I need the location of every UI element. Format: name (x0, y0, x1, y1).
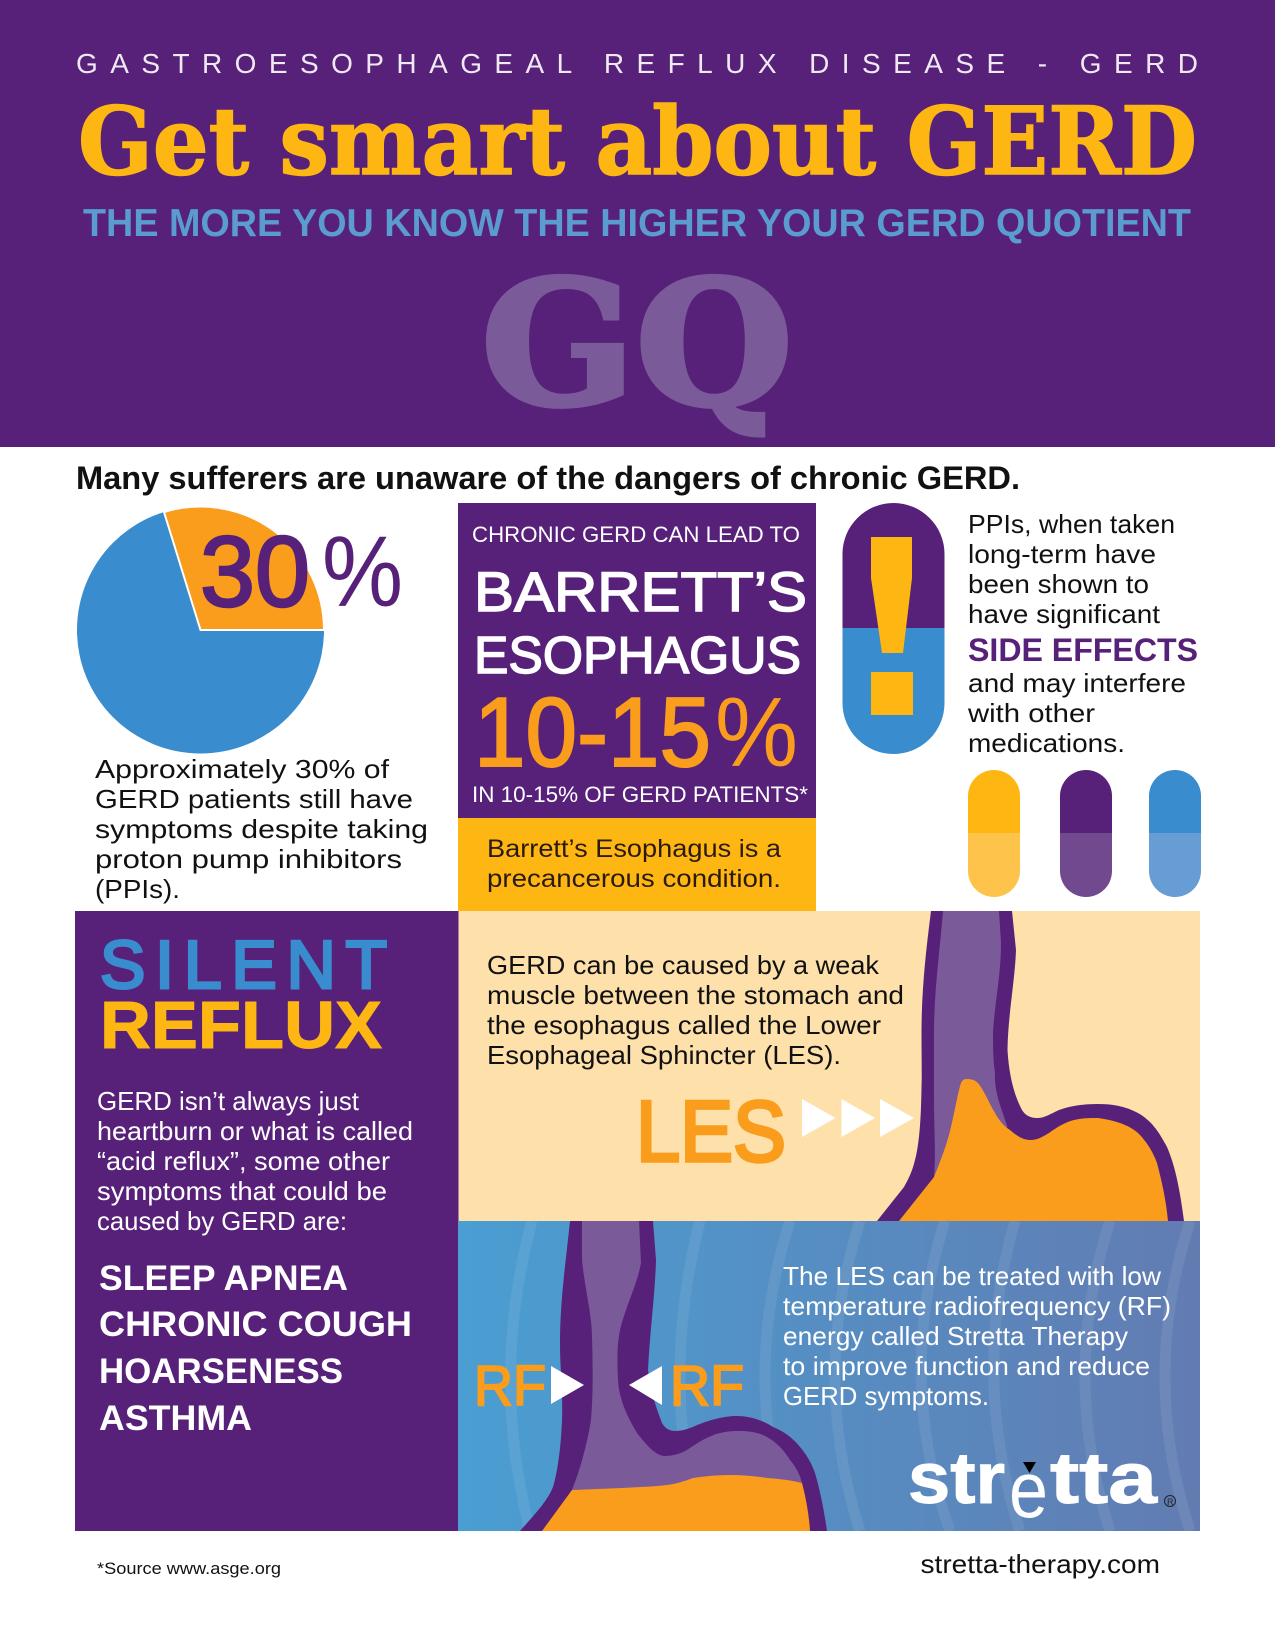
list: symptoms: SLEEP APNEA (99, 1259, 348, 1298)
logo: stretta: str (908, 1439, 1005, 1519)
list: symptoms: ASTHMA (99, 1399, 252, 1438)
text block: LES description: GERD can be caused by a weak (487, 950, 880, 980)
subtitle: THE MORE YOU KNOW THE HIGHER YOUR GERD QUOTIENT (83, 202, 1191, 245)
panel: Barrett's Esophagus (458, 503, 816, 818)
text block: description: “acid reflux”, some other (97, 1146, 390, 1176)
text block: LES description: muscle between the stomach and (487, 980, 904, 1010)
list: symptoms (99, 1259, 412, 1438)
arrow: RF right-pointing (551, 1366, 584, 1404)
text block: PPI side effects: have significant (968, 599, 1161, 629)
heading: reflux: REFLUX (100, 988, 382, 1063)
logo: stretta: R (1167, 1497, 1174, 1507)
statistic: 10-15%: % (715, 677, 798, 787)
text block: PPI side effects: medications. (968, 728, 1125, 758)
text block: LES description: Esophageal Sphincter (LES). (487, 1040, 841, 1070)
list: symptoms: HOARSENESS (99, 1352, 343, 1391)
text block: Stretta description: temperature radiofrequency (RF) (783, 1291, 1171, 1321)
panel: Barrett's Esophagus: CHRONIC GERD CAN LEAD TO (472, 522, 800, 547)
logo: stretta: e (1009, 1445, 1048, 1534)
logo: stretta (908, 1439, 1176, 1534)
text block: LES description: the esophagus called the Lower (487, 1010, 881, 1040)
text block: PPI side effects (967, 509, 1198, 758)
text block: Stretta description: to improve function and reduce (783, 1351, 1150, 1381)
text block: PPI side effects: and may interfere (968, 668, 1186, 698)
text block: description: heartburn or what is called (97, 1116, 413, 1146)
text block: PPI symptoms: Approximately 30% of (95, 754, 390, 784)
text block: PPI side effects: long-term have (968, 539, 1156, 569)
arrows: pointing to LES (802, 1099, 914, 1137)
callout: precancerous condition: Barrett’s Esophagus is a (487, 835, 781, 863)
text block: PPI symptoms: symptoms despite taking (95, 814, 428, 844)
icon: three capsules (968, 770, 1201, 897)
panel: Barrett's Esophagus: BARRETT’S (474, 560, 807, 623)
text block: Stretta description: The LES can be treated with low (783, 1261, 1161, 1291)
panel: header banner (0, 0, 1275, 447)
text block: description: GERD isn’t always just (97, 1086, 360, 1116)
panel: silent reflux (75, 911, 458, 1531)
callout: precancerous condition: precancerous condition. (487, 865, 781, 893)
panel: Barrett's Esophagus: ESOPHAGUS (474, 627, 801, 685)
illustration: esophagus and stomach with reflux (877, 911, 1184, 1221)
illustration: treated esophagus and stomach (520, 1221, 827, 1531)
pie chart: 30 percent (77, 506, 403, 754)
text block: Stretta description: GERD symptoms. (783, 1381, 989, 1411)
icon: exclamation capsule (842, 503, 944, 754)
text block: PPI side effects: with other (967, 698, 1095, 728)
text block: PPI symptoms: proton pump inhibitors (95, 844, 402, 874)
text block: LES description (487, 950, 904, 1070)
footnote: source: *Source www.asge.org (97, 1559, 281, 1578)
text block: description: symptoms that could be (97, 1176, 387, 1206)
panel: Barrett's Esophagus: IN 10-15% OF GERD PATIENTS* (472, 782, 808, 807)
text block: PPI side effects: SIDE EFFECTS (968, 632, 1198, 668)
text block: Stretta description: energy called Stretta Therapy (783, 1321, 1128, 1351)
text block: description (97, 1086, 413, 1236)
text block: PPI symptoms (95, 754, 428, 904)
heading: disease name: GASTROESOPHAGEAL REFLUX DISEASE - GERD (76, 48, 1198, 79)
statistic: 10-15%: 10-15 (474, 677, 711, 787)
footer: website: stretta-therapy.com (920, 1549, 1160, 1579)
text block: description: caused by GERD are: (97, 1206, 347, 1236)
callout: precancerous condition (458, 818, 816, 911)
text block: PPI side effects: PPIs, when taken (968, 509, 1175, 539)
heading: silent: SILENT (100, 927, 387, 1003)
large GQ letters: GQ (481, 242, 793, 445)
title: Get smart about GERD (78, 87, 1197, 197)
arrow: RF left-pointing (629, 1366, 662, 1405)
logo: stretta: tta (1050, 1439, 1158, 1519)
text block: PPI side effects: been shown to (968, 569, 1149, 599)
text block: PPI symptoms: GERD patients still have (95, 784, 413, 814)
text block: Stretta description (783, 1261, 1171, 1411)
label: RF right: RF (670, 1354, 744, 1418)
pie value: 30%: 30 (200, 516, 310, 628)
heading: dangers of chronic GERD: Many sufferers are unaware of the dangers of chronic GERD. (76, 460, 1020, 496)
pie value: 30% (200, 516, 403, 628)
text block: PPI symptoms: (PPIs). (95, 874, 180, 904)
list: symptoms: CHRONIC COUGH (99, 1305, 412, 1344)
pie value: 30%: % (322, 516, 403, 628)
panel: Stretta therapy (458, 1221, 1200, 1534)
label: RF left: RF (474, 1354, 546, 1418)
label: LES: LES (636, 1084, 786, 1180)
panel: LES explanation (458, 911, 1200, 1221)
